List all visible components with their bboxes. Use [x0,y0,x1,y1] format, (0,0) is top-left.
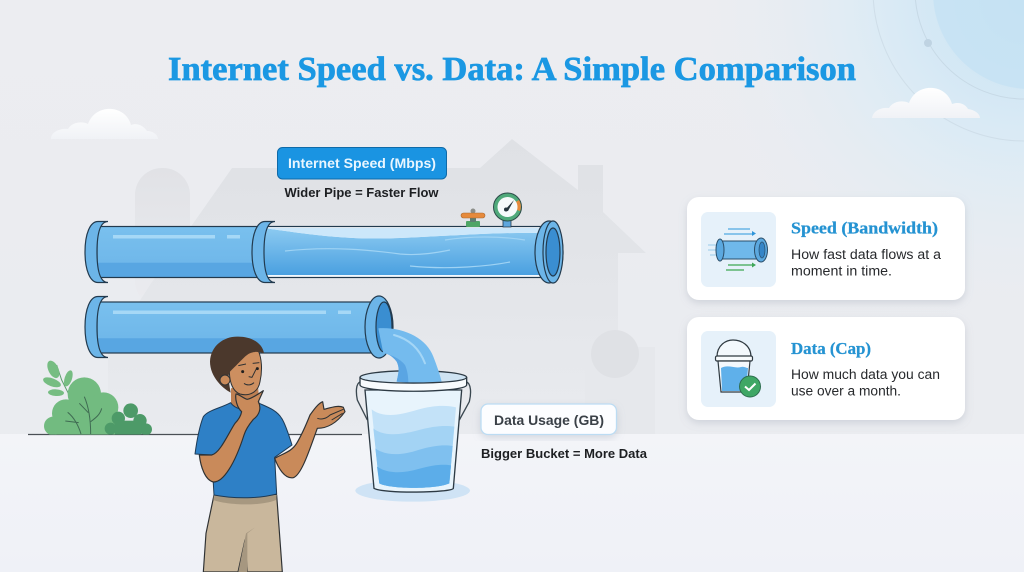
middle flange [252,222,275,282]
bucket shadow [355,480,470,502]
label: data usage: Data Usage (GB) [494,412,604,428]
bush branches [65,397,102,434]
speed description: moment in time. [791,264,892,278]
neck [231,380,260,407]
stream shade [383,353,408,383]
panel: data [687,317,965,420]
pointing arm [275,402,345,478]
main bush [44,377,118,435]
stream highlight [394,335,425,363]
raised arm [199,391,263,482]
bottom pipe [85,296,393,358]
label: internet speed [278,148,446,179]
shirt [195,403,292,498]
leafy sprig [42,359,74,400]
face [229,350,262,395]
water stream [378,328,442,383]
cloud left [51,109,158,139]
house silhouette [108,139,655,434]
icon: valve [461,208,485,227]
trousers [203,495,282,572]
data description: How much data you can [791,367,940,382]
speed heading: Speed (Bandwidth) [791,218,938,238]
bucket [355,328,471,502]
water layers [372,406,456,488]
narrow section [97,226,259,278]
plants [42,359,152,435]
data description: use over a month. [791,384,901,398]
data heading: Data (Cap) [791,339,871,358]
small bush [105,403,152,435]
person [195,337,345,572]
ground [0,434,1024,572]
label: data usage [481,404,616,434]
hair [210,337,264,393]
left flange [85,222,108,282]
label: internet speed: Internet Speed (Mbps) [288,155,436,171]
speed description: How fast data flows at a [791,247,942,262]
wide section with water [262,226,545,278]
icon: bucket with check [701,331,776,407]
caption: wider pipe: Wider Pipe = Faster Flow [284,185,439,200]
facial features [249,369,256,377]
rim front [360,377,467,391]
title: Internet Speed vs. Data: A Simple Comparison [168,51,856,88]
icon: pipe with arrows [701,212,776,287]
bucket rim [360,371,467,384]
panel: speed [687,197,965,300]
ear [220,375,230,385]
caption: bigger bucket: Bigger Bucket = More Data [481,446,648,461]
handle [356,382,471,420]
cloud right [872,88,980,118]
bucket body [365,390,462,492]
right flange [535,221,563,283]
icon: pressure gauge [494,193,522,227]
top pipe [85,221,563,283]
